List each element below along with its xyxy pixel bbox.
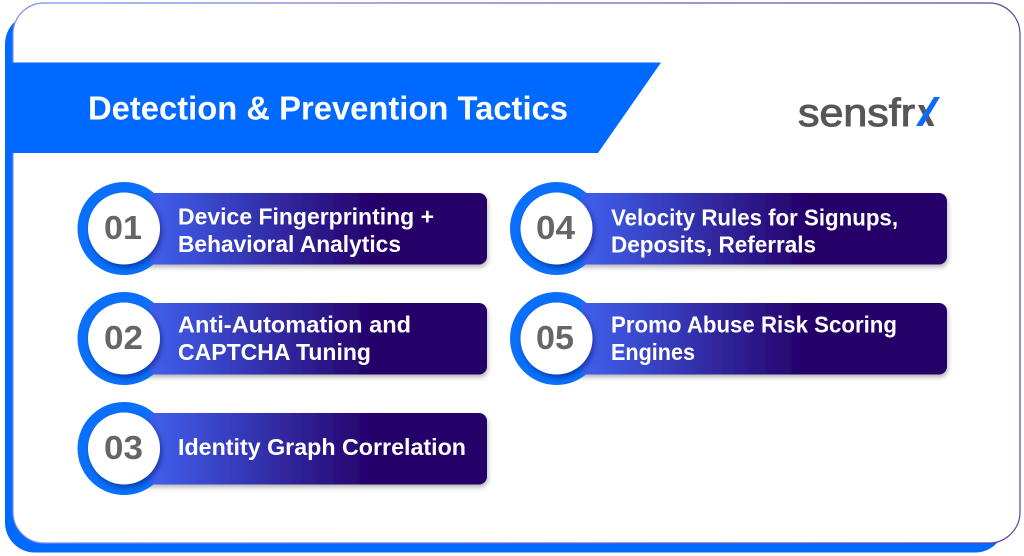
item 05 <box>510 292 947 385</box>
logo: sensfrx: sensfr <box>798 92 915 135</box>
item 03: 03 <box>104 429 143 466</box>
item 02 <box>78 292 487 385</box>
item 03 <box>78 402 487 495</box>
item 01: 01 <box>104 209 142 246</box>
item 01: Behavioral Analytics <box>178 231 401 257</box>
item 03: Identity Graph Correlation <box>178 434 466 460</box>
item 05: Promo Abuse Risk Scoring <box>611 312 897 338</box>
item 05: 05 <box>536 319 574 356</box>
item 04: Velocity Rules for Signups, <box>611 204 898 230</box>
item 04: 04 <box>536 209 576 246</box>
item 01: Device Fingerprinting + <box>178 204 434 230</box>
heading banner <box>5 62 661 153</box>
item 01 <box>78 182 487 275</box>
item 04 <box>510 182 947 275</box>
item 02: CAPTCHA Tuning <box>178 339 371 365</box>
item 02: Anti-Automation and <box>178 312 411 338</box>
title: Detection & Prevention Tactics <box>88 90 568 126</box>
item 05: Engines <box>611 339 695 365</box>
item 02: 02 <box>104 319 143 356</box>
item 04: Deposits, Referrals <box>611 232 816 258</box>
